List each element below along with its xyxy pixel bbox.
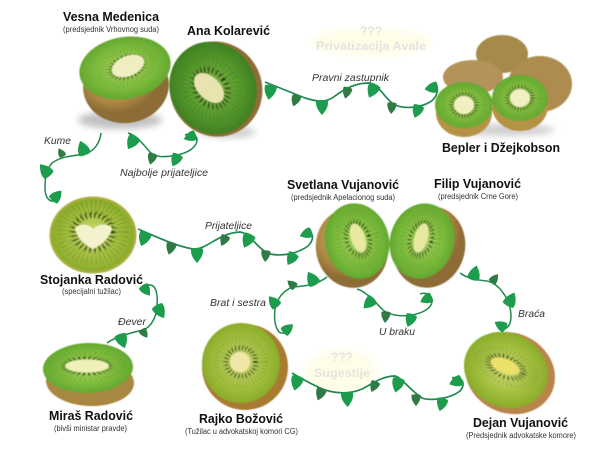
label: Filip Vujanović	[434, 177, 521, 201]
kiwi: Svetlana and Filip Vujanović	[308, 196, 474, 295]
label: Filip Vujanović: Filip Vujanović	[434, 177, 521, 191]
ghost note: Privatizacija Avale: Privatizacija Avale	[316, 39, 426, 53]
vine: Pravni zastupnik	[263, 81, 439, 120]
vine: Đever	[107, 282, 169, 350]
label: Svetlana Vujanović: (predsjednik Apelacionog suda)	[291, 193, 395, 202]
label: Rajko Božović: Rajko Božović	[199, 412, 283, 426]
label: Stojanka Radović	[40, 273, 143, 296]
label: Dejan Vujanović: Dejan Vujanović	[473, 416, 568, 430]
label: Vesna Medenica: Vesna Medenica	[63, 10, 160, 24]
ghost note: Privatizacija Avale	[311, 24, 431, 56]
label: Miraš Radović: Miraš Radović	[49, 409, 133, 423]
label: Vesna Medenica	[63, 10, 160, 34]
kiwi: Ana Kolarević	[154, 26, 278, 152]
ghost note: Sugestije: ???	[331, 350, 353, 364]
label: Vesna Medenica: (predsjednik Vrhovnog suda)	[63, 25, 159, 34]
relation label: Prijateljice: Prijateljice	[205, 220, 252, 232]
kiwi: Dejan Vujanović	[451, 317, 569, 429]
label: Miraš Radović	[49, 409, 133, 433]
vine: Kume	[35, 133, 101, 204]
label: Bepler i Džejkobson: Bepler i Džejkobson	[442, 141, 560, 155]
kiwi: Stojanka Radović	[50, 196, 136, 274]
vine: Sugestije	[289, 373, 464, 413]
label: Svetlana Vujanović: Svetlana Vujanović	[287, 178, 399, 192]
vine: Prijateljice	[136, 227, 314, 268]
label: Svetlana Vujanović	[287, 178, 399, 202]
relation label: Brat i sestra: Brat i sestra	[210, 297, 266, 309]
ghost note: Privatizacija Avale: ???	[360, 24, 382, 38]
ghost note: Sugestije: Sugestije	[314, 366, 370, 380]
label: Miraš Radović: (bivši ministar pravde)	[54, 424, 127, 433]
vine: U braku	[357, 289, 434, 329]
label: Ana Kolarević: Ana Kolarević	[187, 24, 270, 38]
label: Filip Vujanović: (predsjednik Crne Gore)	[438, 192, 518, 201]
relation label: U braku: U braku	[379, 326, 415, 338]
vine: Brat i sestra	[265, 269, 327, 337]
ghost note: Sugestije	[305, 350, 377, 394]
kiwi group: Bepler i Džejkobson	[435, 35, 572, 137]
label: Stojanka Radović: Stojanka Radović	[40, 273, 143, 287]
kiwi: Rajko Božović	[202, 323, 288, 410]
relation label: Kume: Kume	[44, 135, 71, 147]
vine: Najbolje prijateljice	[123, 130, 198, 169]
relation label: Pravni zastupnik: Pravni zastupnik	[312, 72, 390, 84]
label: Stojanka Radović: (specijalni tužilac)	[62, 287, 121, 296]
relation label: Đever: Đever	[118, 316, 146, 328]
label: Rajko Božović: (Tužilac u advokatskoj komori CG)	[185, 427, 298, 436]
label: Dejan Vujanović: (Predsjednik advokatske komore)	[466, 431, 576, 440]
relation label: Braća: Braća	[518, 308, 545, 320]
kiwi: Vesna Medenica	[74, 29, 176, 129]
vine: Braća	[460, 264, 520, 333]
label: Dejan Vujanović	[466, 416, 576, 440]
label: Rajko Božović	[185, 412, 298, 436]
relation label: Najbolje prijateljice: Najbolje prijateljice	[120, 167, 208, 179]
kiwi: Miraš Radović	[42, 341, 135, 408]
